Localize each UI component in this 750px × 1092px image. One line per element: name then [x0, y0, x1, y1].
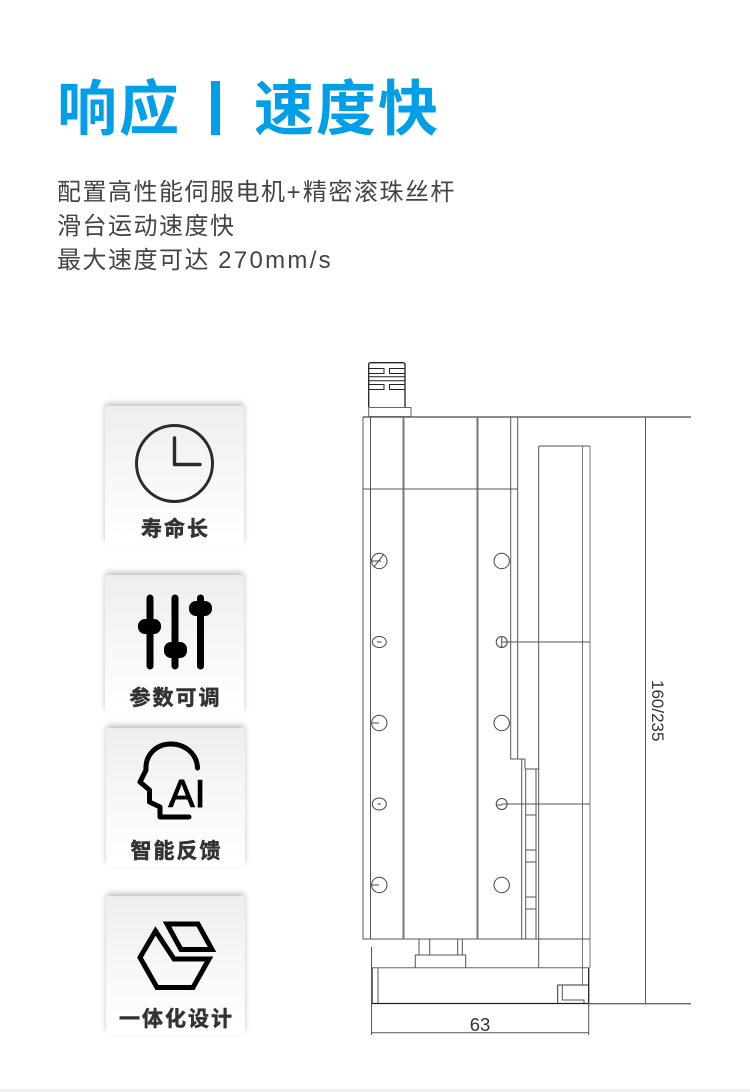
description line 2: 滑台运动速度快: [57, 213, 236, 240]
label: smart feedback: 智能反馈: [130, 840, 222, 863]
title: separator bar: [211, 81, 220, 135]
label: adjustable parameters: 参数可调: [130, 687, 222, 710]
panel: integrated design card: [106, 896, 245, 1035]
footer strip: [0, 1089, 750, 1092]
connector on top: [369, 363, 411, 416]
dimension 63: 63: [470, 1014, 490, 1035]
description line 3: 最大速度可达 270mm/s: [57, 247, 333, 274]
base block: [372, 968, 589, 1004]
panel: adjustable parameters card: [105, 575, 244, 714]
icon: AI head: [137, 742, 206, 820]
chart: technical drawing: 160/235: [648, 680, 667, 741]
icon: cube: [137, 922, 216, 990]
title: right part: 速度快: [254, 76, 440, 143]
label: integrated design: 一体化设计: [119, 1008, 234, 1031]
mounting holes: [372, 553, 509, 893]
label: long life: 寿命长: [141, 518, 210, 541]
icon: clock: [135, 424, 214, 503]
icon: AI head: AI: [168, 773, 206, 816]
description line 1: 配置高性能伺服电机+精密滚珠丝杆: [57, 179, 456, 206]
icon: sliders: [138, 594, 212, 670]
dimension 63: [372, 947, 589, 1035]
text block: description: [57, 179, 456, 274]
title: left part: 响应: [57, 76, 181, 143]
dimension 160/235: [589, 1003, 691, 1005]
panel: long life card: [105, 406, 244, 545]
panel: smart feedback card: [106, 728, 245, 867]
shaft and collar: [415, 939, 466, 968]
main body outline: [363, 417, 691, 1004]
